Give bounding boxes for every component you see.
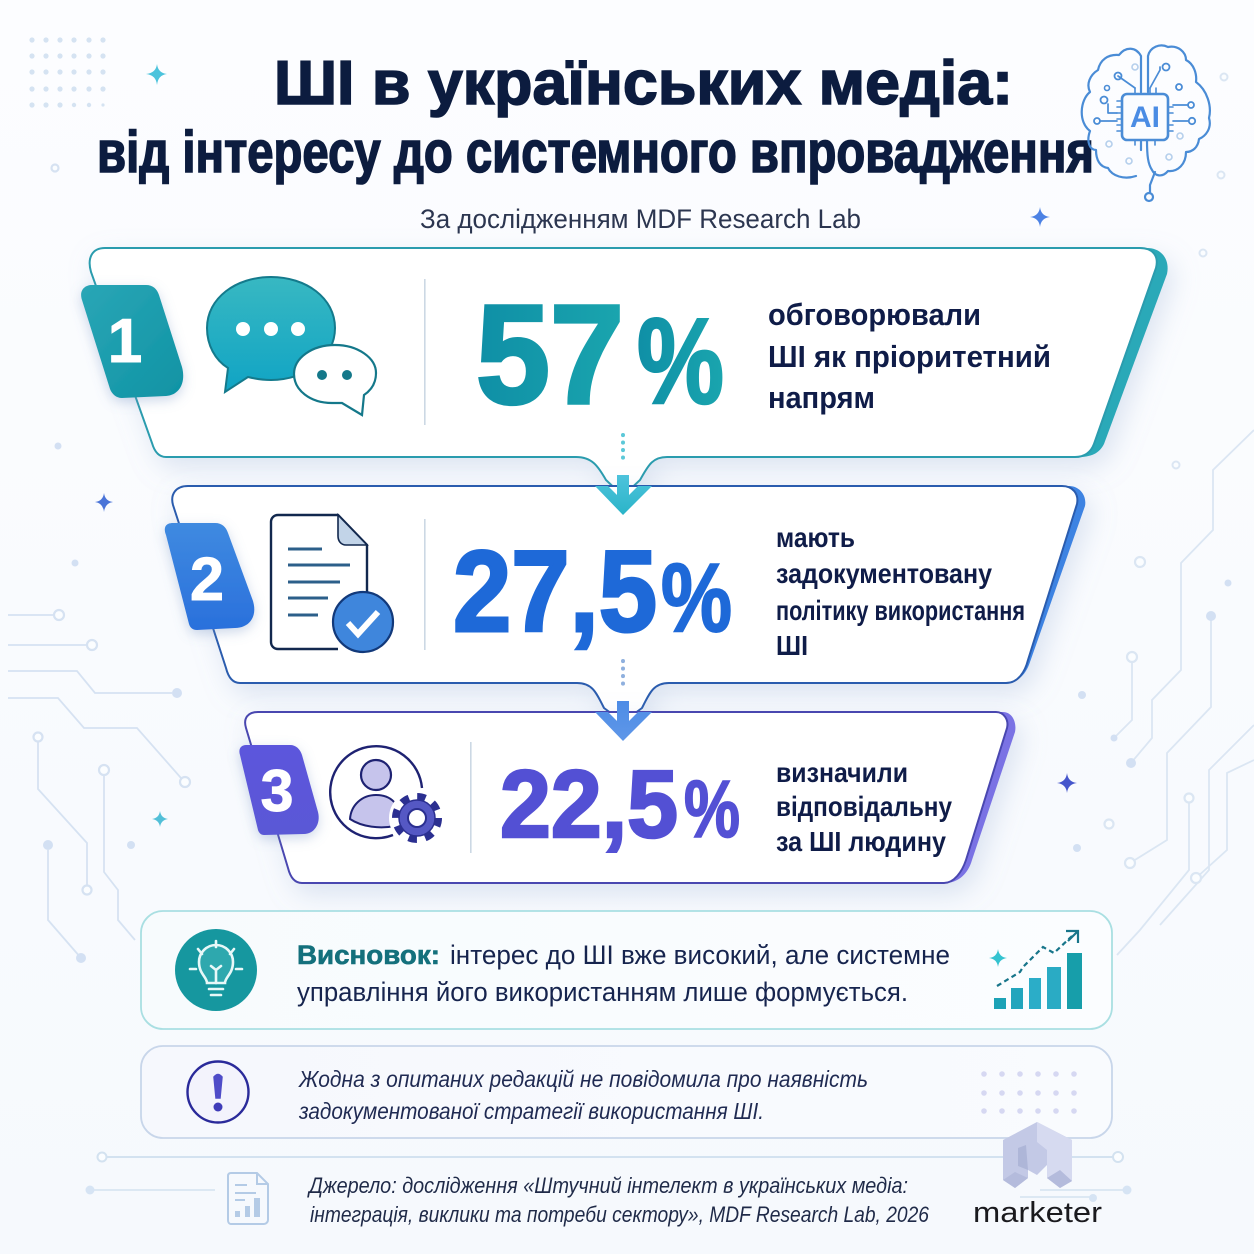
step 2 number badge	[165, 523, 254, 630]
arrow: step 2 to step 3	[595, 661, 652, 741]
arrow: step 1 to step 2	[595, 435, 652, 515]
step 1 number badge: 1	[108, 307, 142, 376]
step 2 description: мають	[776, 522, 855, 553]
panel: step 1	[81, 248, 1168, 496]
conclusion text: Висновок:	[297, 940, 440, 970]
icon: growth chart	[989, 931, 1082, 1009]
icon: document with check	[271, 515, 393, 652]
stat 27,5%: 27,5	[453, 528, 657, 656]
warning text: задокументованої стратегії використання ШІ.	[298, 1098, 764, 1124]
warning text: Жодна з опитаних редакцій не повідомила про наявність	[298, 1066, 868, 1092]
step 1 description: обговорювали	[768, 297, 981, 332]
sparkle icons	[95, 64, 1077, 827]
icon: chat bubbles	[207, 277, 376, 415]
step 3 description: відповідальну	[776, 791, 952, 822]
source text	[306, 1173, 930, 1227]
panel: step 2	[165, 486, 1085, 722]
step 3 description	[776, 757, 952, 857]
panel: step 3	[239, 712, 1015, 883]
step 1 description: ШІ як пріоритетний	[768, 339, 1051, 374]
stat 22,5%: 22,5	[500, 751, 678, 858]
icon: AI brain	[1082, 45, 1210, 201]
conclusion text	[297, 940, 950, 1007]
step 2 number badge: 2	[190, 545, 224, 613]
step 3 description: визначили	[776, 757, 908, 788]
icon: source document	[228, 1173, 268, 1224]
stat 22,5%: %	[684, 765, 740, 855]
dot grid	[981, 1071, 1077, 1114]
decorative circuit lines right	[1073, 74, 1254, 955]
stat 57%: 57	[476, 275, 624, 433]
step 3 description: за ШІ людину	[776, 826, 946, 857]
panel: conclusion	[141, 911, 1112, 1029]
icon: person with gear	[330, 746, 445, 846]
panel: warning note	[141, 1046, 1112, 1138]
dot grid top left	[29, 37, 106, 108]
icon: exclamation	[188, 1062, 248, 1122]
logo: marketer	[973, 1122, 1102, 1229]
source text: Джерело: дослідження «Штучний інтелект в українських медіа:	[306, 1173, 908, 1198]
warning text	[298, 1066, 868, 1124]
step 1 description	[768, 297, 1051, 415]
stat 57%	[476, 275, 724, 433]
step 2 description	[776, 522, 1025, 661]
step 3 number badge	[239, 745, 319, 835]
icon: AI brain: AI	[1130, 101, 1160, 134]
logo: marketer: marketer	[973, 1197, 1102, 1229]
conclusion text: інтерес до ШІ вже високий, але системне	[450, 940, 950, 970]
icon: light bulb	[175, 929, 257, 1011]
step 2 description: ШІ	[776, 630, 808, 661]
decorative circuit lines left	[8, 164, 190, 963]
title	[97, 49, 1094, 185]
footer circuit lines	[86, 1152, 1132, 1202]
stat 27,5%: %	[661, 543, 732, 652]
step 3 number badge: 3	[261, 758, 293, 824]
title: ШІ в українських медіа:	[274, 49, 1013, 118]
step 1 number badge	[81, 285, 183, 398]
subtitle: За дослідженням MDF Research Lab	[420, 204, 861, 234]
stat 57%: %	[637, 293, 724, 429]
step 2 description: політику використання	[776, 595, 1025, 626]
conclusion text: управління його використанням лише формується.	[297, 977, 908, 1007]
step 1 description: напрям	[768, 380, 875, 415]
step 2 description: задокументовану	[776, 558, 992, 589]
source text: інтеграція, виклики та потреби сектору», MDF Research Lab, 2026	[310, 1202, 930, 1227]
